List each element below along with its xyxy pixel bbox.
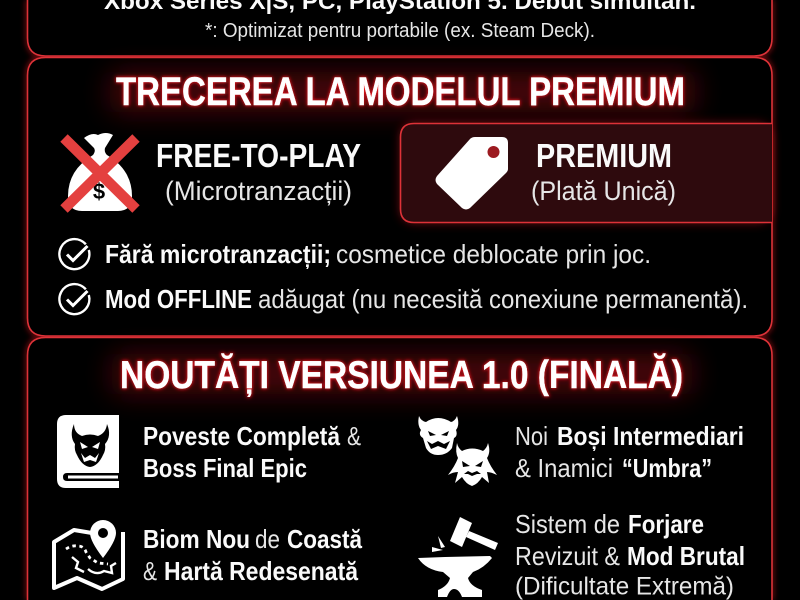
benefit: no microtransactions: cosmetice deblocate prin joc. xyxy=(336,239,651,269)
panel: premium model xyxy=(28,58,772,336)
panel: version 1.0 news xyxy=(28,338,772,600)
heading glow xyxy=(112,354,692,394)
icon: demon book xyxy=(57,415,119,488)
feature: new coastal biome: Hartă Redesenată xyxy=(164,556,358,586)
feature: new bosses: Boși Intermediari xyxy=(557,421,744,451)
handheld note: *: Optimizat pentru portabile (ex. Steam Deck). xyxy=(205,20,595,42)
feature: new bosses: Noi xyxy=(515,421,548,451)
icon: price tag xyxy=(436,137,508,210)
microtransactions label: (Microtranzacții) xyxy=(165,176,352,206)
icon: two demons xyxy=(418,416,497,486)
feature: forging system xyxy=(515,509,745,600)
feature: full story: & xyxy=(347,421,361,451)
icon: map with pin xyxy=(54,520,123,589)
feature: new coastal biome: Coastă xyxy=(287,524,362,554)
heading glow xyxy=(110,72,695,112)
feature: forging system: Mod Brutal xyxy=(627,541,745,571)
benefit: offline mode: Mod OFFLINE xyxy=(105,284,252,314)
heading: NOUTĂȚI VERSIUNEA 1.0 (FINALĂ) xyxy=(120,353,683,397)
feature: new bosses xyxy=(515,421,744,483)
premium panel glow xyxy=(400,123,772,223)
feature: full story: Boss Final Epic xyxy=(143,453,307,483)
panel: platforms xyxy=(28,0,772,56)
feature: new coastal biome: & xyxy=(143,556,157,586)
benefit: offline mode: adăugat (nu necesită conexiune permanentă). xyxy=(258,284,748,314)
icon: tag hole xyxy=(488,146,500,158)
feature: forging system: Forjare xyxy=(628,509,704,539)
feature: new bosses: “Umbra” xyxy=(622,453,712,483)
icon: check 2 xyxy=(59,284,89,314)
feature: forging system: (Dificultate Extremă) xyxy=(515,572,734,600)
icon: check 1 xyxy=(59,239,89,269)
feature: forging system: Sistem de xyxy=(515,509,620,539)
feature: forging system: Revizuit & xyxy=(515,541,620,571)
feature: full story xyxy=(143,421,361,483)
feature: full story: Poveste Completă xyxy=(143,421,340,451)
icon: crossed money bag xyxy=(64,133,136,211)
panel: premium box xyxy=(400,124,772,222)
benefit: no microtransactions: Fără microtranzacții; xyxy=(105,239,331,269)
feature: new coastal biome xyxy=(143,524,362,586)
heading glow text: NOUTĂȚI VERSIUNEA 1.0 (FINALĂ) xyxy=(120,353,683,397)
icon: crossed money bag: $ xyxy=(93,179,105,204)
one-time payment label: (Plată Unică) xyxy=(531,176,676,206)
premium label: PREMIUM xyxy=(536,137,672,174)
benefit: no microtransactions xyxy=(105,239,651,269)
feature: new bosses: & Inamici xyxy=(515,453,613,483)
free-to-play label: FREE-TO-PLAY xyxy=(156,137,361,174)
heading: TRECEREA LA MODELUL PREMIUM xyxy=(116,70,685,114)
feature: new coastal biome: de xyxy=(255,524,280,554)
icon: anvil and hammer xyxy=(418,517,498,597)
heading glow text: TRECEREA LA MODELUL PREMIUM xyxy=(116,70,685,114)
feature: new coastal biome: Biom Nou xyxy=(143,524,250,554)
